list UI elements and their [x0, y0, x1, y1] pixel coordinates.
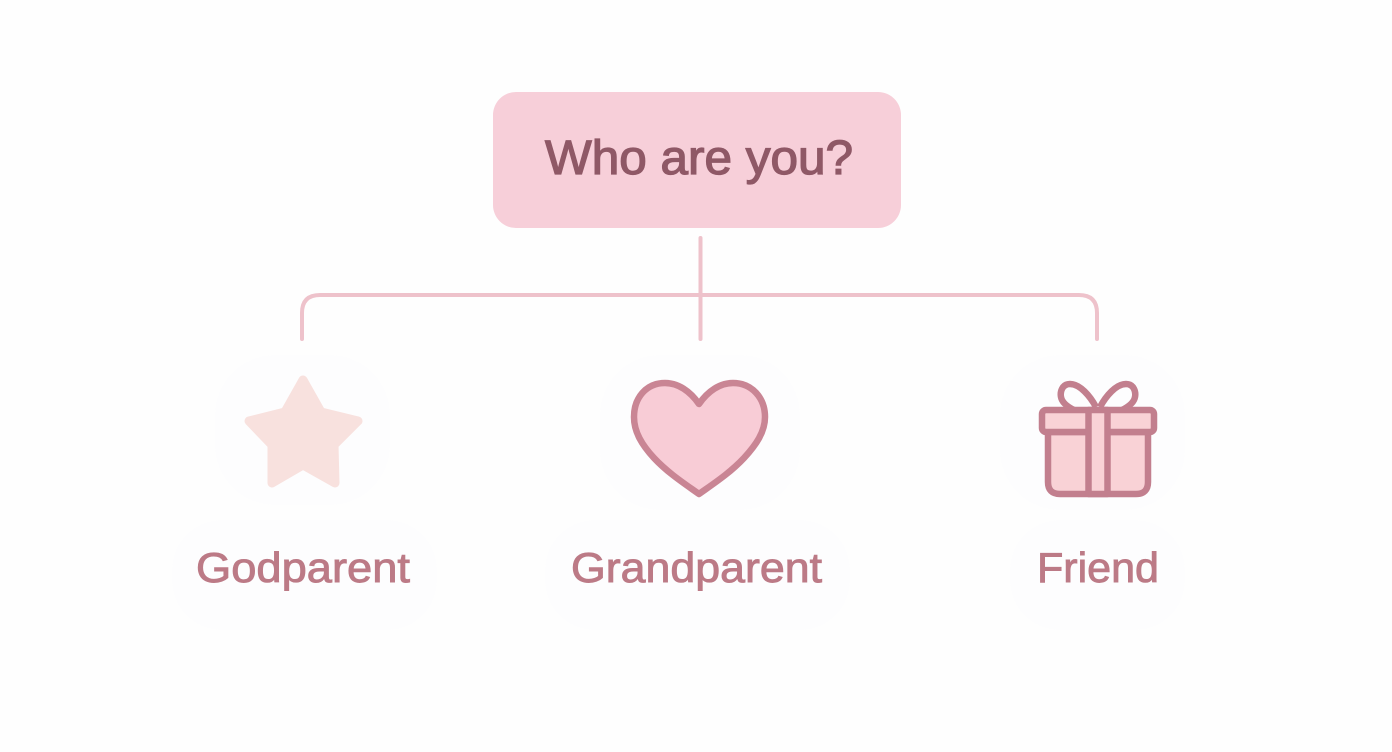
- label: Godparent: Godparent: [196, 544, 410, 591]
- branch: Friend: [1037, 384, 1159, 591]
- icon: heart: [634, 383, 765, 494]
- heading: Who are you?: Who are you?: [545, 132, 853, 185]
- icon: gift box: [1042, 384, 1154, 494]
- icon: star: [249, 380, 358, 483]
- question box: [493, 92, 901, 228]
- label: Grandparent: Grandparent: [571, 544, 822, 591]
- label: Friend: Friend: [1037, 544, 1159, 591]
- box background: [493, 92, 901, 228]
- branch: Godparent: [196, 380, 410, 591]
- connector tree: [302, 238, 1097, 339]
- branch: Grandparent: [571, 383, 822, 591]
